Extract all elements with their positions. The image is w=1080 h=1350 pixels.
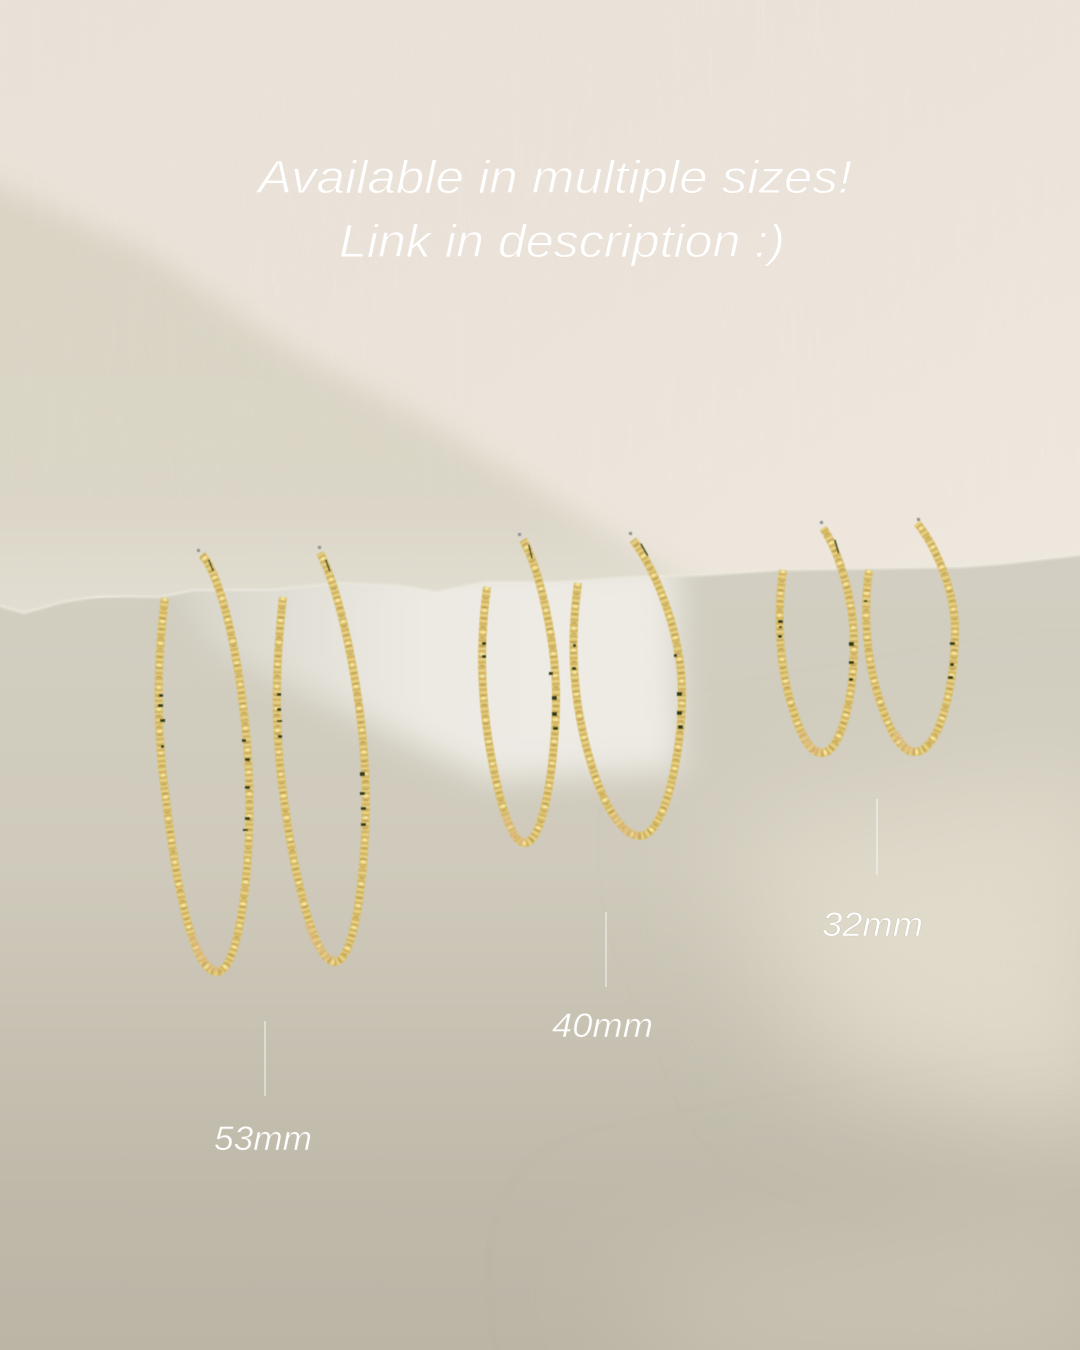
warm light lower right: [710, 1238, 1080, 1350]
size label: 32mm: 32mm: [822, 906, 923, 944]
size label: 53mm: [214, 1021, 312, 1158]
hoop 32mm right: [864, 518, 955, 752]
paper shadow diagonal: [0, 184, 670, 610]
size label: 40mm: [552, 912, 653, 1045]
size label: 40mm: 40mm: [552, 1007, 653, 1045]
title text: Available in multiple sizes!: [255, 151, 852, 203]
background: wall below paper: [0, 540, 1080, 1350]
hoop 40mm left: [482, 533, 558, 843]
torn edge highlight: [0, 555, 1080, 613]
size label: 53mm: 53mm: [214, 1120, 312, 1158]
hoop 40mm right: [572, 532, 683, 836]
warm light on right wall: [748, 780, 1080, 1144]
lit patch behind hoops: [170, 560, 680, 780]
earring pair: 53mm: [158, 546, 366, 972]
earring pair: 40mm: [482, 532, 683, 843]
hoop 32mm left: [778, 521, 854, 753]
paper sheet: [683, 553, 1080, 575]
title text: [255, 151, 852, 267]
hoop 53mm right: [277, 546, 366, 962]
title text: Link in description :): [339, 215, 785, 267]
background: torn paper: [0, 180, 1080, 614]
earring pair: 32mm: [778, 518, 955, 753]
hoop 53mm left: [158, 549, 250, 972]
